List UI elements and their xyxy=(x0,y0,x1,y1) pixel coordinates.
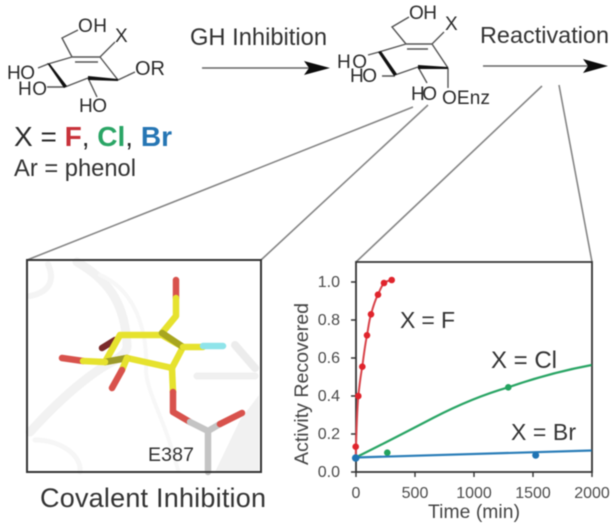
series label: X = Br: X = Br xyxy=(511,419,576,445)
enzyme-bound structure: HO xyxy=(350,66,377,87)
label: GH Inhibition: GH Inhibition xyxy=(190,25,327,51)
enzyme-bound structure: X xyxy=(445,14,458,35)
zoom lines to structure panel xyxy=(27,105,428,260)
label: Reactivation: Reactivation xyxy=(480,22,609,48)
starting sugar structure: OR xyxy=(135,58,165,80)
halogen legend: X = F, Cl, Br xyxy=(14,121,172,152)
y axis labels: 0.2 xyxy=(318,426,340,443)
x axis labels: 2000 xyxy=(574,485,610,502)
protein ribbons xyxy=(30,262,255,472)
chart: activity recovered vs time xyxy=(291,262,610,523)
residue label: E387 xyxy=(148,444,194,466)
y axis labels: 1.0 xyxy=(318,274,340,291)
panel: covalent inhibition crystal structure xyxy=(27,260,261,472)
zoom lines to chart xyxy=(356,85,592,262)
starting sugar structure: HO xyxy=(18,79,47,100)
starting sugar structure: HO xyxy=(79,96,107,117)
arrow: inhibition xyxy=(202,61,330,75)
x axis labels: 500 xyxy=(402,485,428,502)
plot frame xyxy=(356,262,592,472)
enzyme-bound structure: HO xyxy=(411,84,437,105)
arrow: reactivation xyxy=(483,59,608,73)
enzyme-bound structure: HO xyxy=(337,52,367,73)
y axis labels: 0.4 xyxy=(318,388,340,405)
y axis labels: 0.8 xyxy=(318,312,340,329)
enzyme-bound structure: OH xyxy=(409,3,437,24)
ligand stick model xyxy=(62,280,242,472)
y axis labels: 0.6 xyxy=(318,350,340,367)
starting sugar structure xyxy=(7,16,165,117)
x axis labels: 0 xyxy=(352,485,361,502)
protein sheet shadow xyxy=(215,395,259,472)
x axis labels: 1500 xyxy=(515,485,551,502)
enzyme-bound structure: OEnz xyxy=(442,88,490,109)
y axis labels: 0.0 xyxy=(318,464,340,481)
series label: X = Cl: X = Cl xyxy=(491,347,557,374)
x axis title: Time (min) xyxy=(428,502,520,523)
aryl legend: Ar = phenol xyxy=(14,156,136,182)
axis ticks xyxy=(351,282,592,477)
series: X = F xyxy=(352,277,395,458)
series: X = Br xyxy=(352,450,592,462)
y axis labels xyxy=(318,274,340,481)
enzyme-bound structure xyxy=(337,3,490,109)
series label: X = F: X = F xyxy=(400,307,455,333)
series: X = Cl xyxy=(356,365,592,458)
starting sugar structure: HO xyxy=(7,63,35,84)
x axis labels: 1000 xyxy=(456,485,492,502)
x axis labels xyxy=(352,485,610,502)
panel caption: Covalent Inhibition xyxy=(40,483,266,513)
starting sugar structure: X xyxy=(115,26,128,47)
y axis title: Activity Recovered xyxy=(291,303,313,465)
starting sugar structure: OH xyxy=(78,16,107,37)
